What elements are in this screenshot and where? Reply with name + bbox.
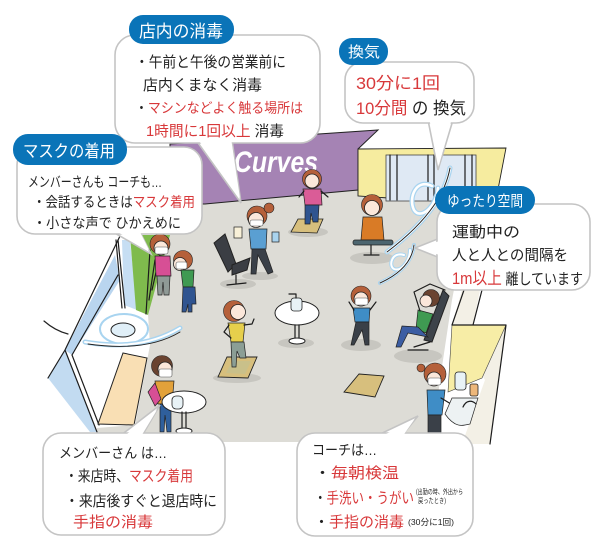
panel: store disinfection: 店内くまなく消毒	[143, 77, 262, 94]
panel: coaches: ・毎朝検温	[314, 465, 399, 482]
exercise mat top	[288, 219, 328, 237]
heading: マスクの着用	[23, 142, 115, 161]
airflow swirl upper	[387, 168, 450, 252]
panel: members: ・来店時、マスク着用	[65, 468, 193, 485]
heading: 換気	[348, 44, 380, 61]
person: coach washing hands at sink	[417, 363, 478, 433]
panel: store disinfection: 1時間に1回以上 消毒	[146, 123, 284, 140]
peach door	[98, 353, 147, 425]
sanitizer table centre	[275, 294, 319, 348]
panel: spacious room: 人と人との間隔を	[452, 247, 568, 264]
panel: ventilation: 10分間 の 換気	[356, 99, 466, 118]
panel: store disinfection: ・マシンなどよく触る場所は	[135, 100, 303, 116]
right wall with yellow panel	[448, 290, 506, 444]
person: pink masked member	[150, 234, 171, 295]
text: メンバーさん は…	[59, 445, 167, 461]
small note: (出勤の時、外出から	[416, 487, 463, 496]
floor	[97, 190, 470, 442]
purple wall with logo	[170, 130, 378, 204]
panel: members: ・来店後すぐと退店時に	[65, 493, 217, 510]
text: ・午前と午後の営業前に	[135, 54, 286, 71]
heading: ゆったり空間	[447, 193, 523, 210]
panel: mask wearing: ・小さな声で ひかえめに	[33, 215, 181, 231]
text: コーチは…	[312, 442, 377, 458]
text: 運動中の	[452, 224, 520, 241]
heading: 店内の消毒	[139, 22, 223, 41]
panel: members: 手指の消毒	[73, 514, 153, 531]
person: reclined chair stretching green	[394, 284, 449, 363]
purple wall with logo: Curves	[234, 146, 318, 179]
panel: coaches: ・手指の消毒	[314, 514, 404, 531]
person: blue coach right	[341, 286, 381, 351]
panel: spacious room: 1m以上 離しています	[452, 269, 583, 288]
empty office chair	[214, 234, 256, 289]
panel: mask wearing	[13, 134, 202, 254]
text: メンバーさんも コーチも…	[28, 174, 162, 190]
person: member with pink bag	[148, 356, 174, 432]
text: 30分に1回	[356, 74, 440, 93]
panel: store disinfection	[115, 15, 320, 203]
panel: members	[43, 405, 225, 535]
left wall with blue window	[48, 235, 170, 432]
panel: coaches: (30分に1回)	[408, 517, 454, 527]
sanitizer table lower	[162, 391, 206, 434]
person: pink runner	[299, 170, 328, 224]
person: yellow shirt on mat	[224, 300, 254, 367]
label	[13, 134, 127, 165]
speech tail	[196, 140, 241, 203]
label	[435, 186, 535, 214]
person: coach with spray and clipboard	[234, 203, 279, 280]
airflow swirl left	[44, 314, 180, 346]
yellow wall with window	[358, 148, 506, 205]
label	[129, 15, 234, 44]
person: green masked member	[174, 250, 196, 312]
small note: 戻ったとき)	[418, 497, 446, 505]
airflow swirl lower	[380, 245, 414, 283]
panel: coaches	[297, 416, 473, 536]
person: seated orange machine user	[350, 194, 394, 264]
panel: ventilation	[339, 38, 474, 170]
exercise mat centre	[213, 357, 261, 383]
small note	[416, 487, 463, 505]
panel: coaches: ・手洗い・うがい	[314, 490, 414, 507]
panel: spacious room	[415, 186, 590, 290]
label	[339, 38, 388, 65]
empty exercise mat	[344, 374, 384, 397]
panel: mask wearing: ・会話するときはマスク着用	[33, 194, 195, 210]
